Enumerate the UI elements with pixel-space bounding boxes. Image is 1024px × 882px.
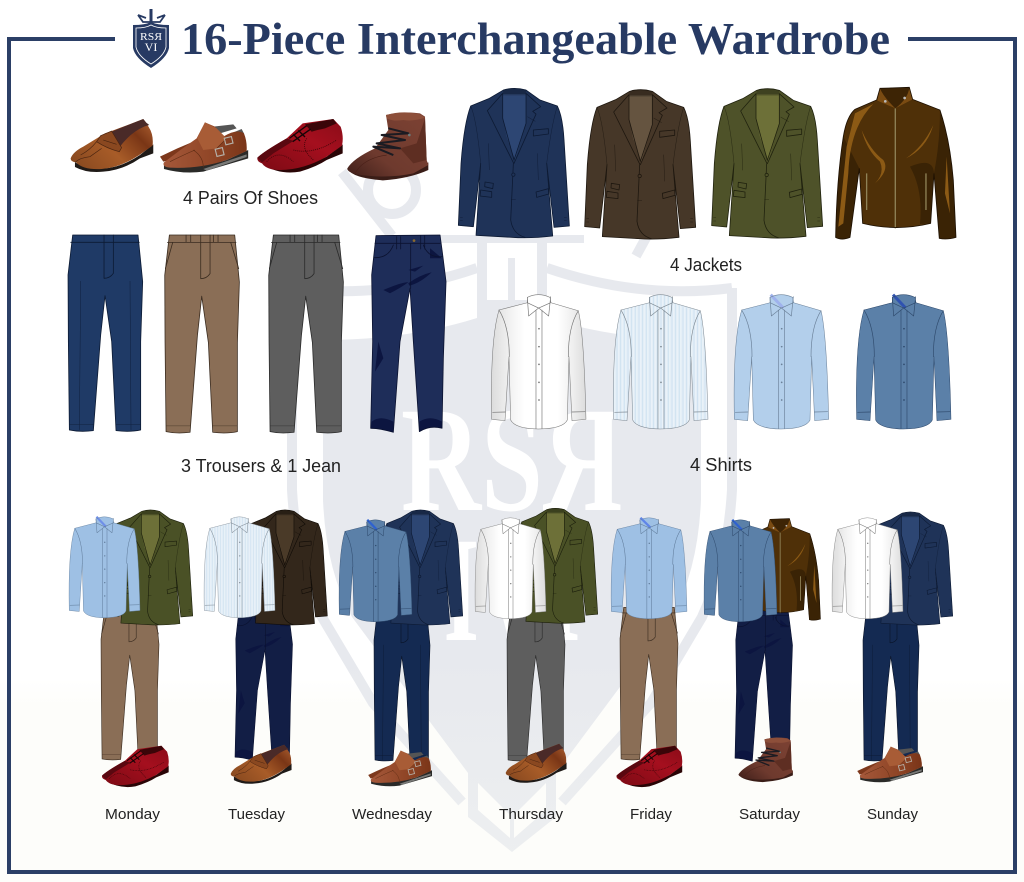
panel: four shirts: [491, 295, 951, 475]
outfit: Thursday: [475, 508, 598, 823]
label: Monday: Monday: [105, 806, 161, 823]
icon: olive blazer: [712, 89, 823, 238]
icon: navy trousers: [68, 235, 143, 431]
icon: grey trousers: [269, 235, 343, 433]
icon: brown blazer: [585, 90, 696, 239]
panel: four jackets: [458, 87, 956, 275]
outfit: Tuesday: [204, 510, 327, 823]
label: trousers: 3 Trousers & 1 Jean: [181, 455, 341, 476]
outfit: Friday: [611, 518, 687, 823]
outfit: Wednesday: [339, 510, 463, 823]
icon: white shirt: [491, 295, 586, 429]
watermark: faded crest: IVI: [444, 507, 580, 673]
logo: shield and crown: RSЯ: [140, 31, 163, 43]
icon: tan trousers: [165, 235, 239, 433]
icon: wingtip shoe: [257, 119, 343, 173]
label: Wednesday: Wednesday: [352, 806, 432, 823]
outfit: Saturday: [704, 519, 820, 823]
icon: jeans: [371, 235, 446, 432]
logo: shield and crown: VI: [145, 40, 157, 54]
icon: leather jacket: [836, 87, 956, 239]
title: 16-Piece Interchangeable Wardrobe: [181, 14, 890, 64]
icon: boot: [347, 112, 428, 180]
watermark: faded crest: RSЯ: [401, 377, 623, 543]
panel: four pairs of shoes: [71, 112, 428, 208]
icon: striped shirt: [613, 295, 708, 429]
label: shirts: 4 Shirts: [690, 454, 752, 475]
label: Sunday: Sunday: [867, 806, 919, 823]
label: Friday: Friday: [630, 806, 672, 823]
watermark: faded crest: [292, 166, 732, 852]
logo: shield and crown: [133, 9, 169, 68]
outfit: Monday: [69, 510, 193, 823]
label: Saturday: Saturday: [739, 806, 800, 823]
label: Thursday: Thursday: [499, 806, 564, 823]
label: shoes: 4 Pairs Of Shoes: [183, 187, 318, 208]
icon: light blue shirt: [734, 295, 829, 429]
icon: monk strap shoe: [160, 122, 248, 173]
icon: denim shirt: [856, 295, 951, 429]
label: Tuesday: Tuesday: [228, 806, 285, 823]
label: jackets: 4 Jackets: [670, 254, 742, 275]
icon: navy blazer: [458, 88, 569, 238]
panel: trousers and jeans: [68, 235, 446, 476]
icon: loafer: [71, 119, 153, 172]
outfit: Sunday: [832, 512, 953, 823]
